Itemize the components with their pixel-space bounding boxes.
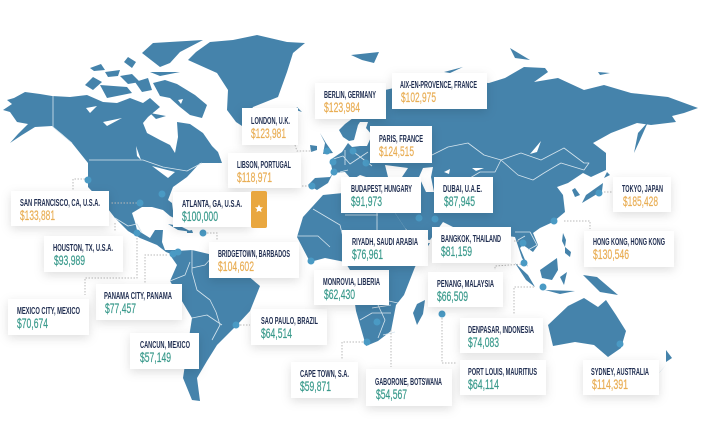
city name: CANCUN, MEXICO xyxy=(140,340,190,351)
card: San Francisco xyxy=(11,191,109,226)
Greenland xyxy=(188,35,305,126)
icon: star badge xyxy=(251,191,267,228)
city name: PORT LOUIS, MAURITIUS xyxy=(468,367,537,378)
card: Panama City xyxy=(96,284,182,320)
city name: PARIS, FRANCE xyxy=(379,134,423,145)
salary: $118,971 xyxy=(237,169,272,185)
city name: LONDON, U.K. xyxy=(251,116,290,127)
card: Atlanta (highlighted) xyxy=(173,191,267,228)
salary: $100,000 xyxy=(182,208,218,224)
country borders xyxy=(53,96,589,340)
city name: SAN FRANCISCO, CA, U.S.A. xyxy=(20,198,100,209)
card: London xyxy=(242,108,298,145)
card: Aix-en-Provence xyxy=(392,73,487,109)
salary: $124,515 xyxy=(379,143,414,159)
North America xyxy=(3,92,222,256)
Canadian Arctic islands xyxy=(85,40,207,119)
city name: DUBAI, U.A.E. xyxy=(443,184,482,195)
card: Bangkok xyxy=(432,227,511,263)
inland water xyxy=(86,99,541,192)
Cuba and Caribbean xyxy=(168,224,193,233)
South America xyxy=(170,250,260,401)
salary: $185,428 xyxy=(623,193,658,209)
salary: $54,567 xyxy=(376,386,407,402)
city name: RIYADH, SAUDI ARABIA xyxy=(352,237,418,248)
salary: $64,514 xyxy=(261,325,292,341)
card: Lisbon xyxy=(228,153,301,188)
Madagascar xyxy=(413,300,425,325)
salary: $59,871 xyxy=(300,378,331,394)
connector lines xyxy=(73,145,612,367)
city name: TOKYO, JAPAN xyxy=(622,184,663,195)
card: Riyadh xyxy=(342,230,428,266)
city name: AIX-EN-PROVENCE, FRANCE xyxy=(400,80,477,91)
salary: $133,881 xyxy=(20,207,55,223)
city name: DENPASAR, INDONESIA xyxy=(468,325,534,336)
card: Berlin xyxy=(315,83,386,119)
Eurasia xyxy=(308,67,698,267)
city name: SYDNEY, AUSTRALIA xyxy=(591,367,649,378)
city name: BANGKOK, THAILAND xyxy=(441,234,501,245)
card: Cancun xyxy=(130,333,199,369)
card: Hong Kong xyxy=(584,231,674,267)
city name: PANAMA CITY, PANAMA xyxy=(104,291,172,302)
city name: MEXICO CITY, MEXICO xyxy=(17,306,80,317)
city name: ATLANTA, GA, U.S.A. xyxy=(182,199,242,210)
card: Bridgetown xyxy=(209,242,299,278)
city name: MONROVIA, LIBERIA xyxy=(323,277,380,288)
city name: BRIDGETOWN, BARBADOS xyxy=(218,249,290,260)
salary: $57,149 xyxy=(140,349,171,365)
card: Budapest xyxy=(341,177,421,213)
salary: $130,546 xyxy=(593,246,629,262)
card: Sydney xyxy=(583,360,659,395)
salary: $114,391 xyxy=(592,376,628,392)
islands of Asia-Pacific xyxy=(515,122,672,373)
card: Gaborone xyxy=(366,369,452,406)
card: Penang xyxy=(428,272,503,307)
card: Sao Paulo xyxy=(251,309,327,345)
salary: $123,981 xyxy=(251,125,286,141)
card: Mexico City xyxy=(8,299,89,335)
salary: $70,674 xyxy=(17,315,48,331)
city name: CAPE TOWN, S.A. xyxy=(300,369,349,380)
card: Houston xyxy=(44,236,123,272)
Africa xyxy=(297,193,430,346)
salary: $93,989 xyxy=(54,252,85,268)
city location dots xyxy=(84,148,624,348)
salary: $102,975 xyxy=(401,89,436,105)
salary: $123,984 xyxy=(324,99,360,115)
salary: $77,457 xyxy=(105,300,136,316)
Australia xyxy=(548,298,626,357)
card: Dubai xyxy=(434,177,493,213)
card: Tokyo xyxy=(613,177,671,212)
card: Paris xyxy=(370,126,432,163)
northern islands xyxy=(296,48,610,112)
card: Port Louis xyxy=(460,360,546,395)
salary: $66,509 xyxy=(437,288,468,304)
salary: $87,945 xyxy=(444,193,475,209)
city name: PENANG, MALAYSIA xyxy=(437,279,494,290)
salary: $64,114 xyxy=(468,376,499,392)
card: Denpasar xyxy=(460,318,543,353)
UK and Ireland xyxy=(310,133,333,154)
salary: $91,973 xyxy=(351,193,382,209)
salary: $81,159 xyxy=(441,243,472,259)
card: Monrovia xyxy=(314,270,389,305)
card: Cape Town xyxy=(291,362,358,398)
city name: GABORONE, BOTSWANA xyxy=(375,377,442,388)
salary: $74,083 xyxy=(468,334,499,350)
city name: BUDAPEST, HUNGARY xyxy=(351,184,412,195)
salary: $104,602 xyxy=(218,258,254,274)
Korea xyxy=(572,188,580,197)
city name: HOUSTON, TX, U.S.A. xyxy=(53,243,113,254)
city name: BERLIN, GERMANY xyxy=(324,90,376,101)
salary: $76,961 xyxy=(352,246,383,262)
salary: $62,430 xyxy=(324,286,355,302)
city name: LIBSON, PORTUGAL xyxy=(237,160,291,171)
city name: SAO PAULO, BRAZIL xyxy=(261,316,318,327)
